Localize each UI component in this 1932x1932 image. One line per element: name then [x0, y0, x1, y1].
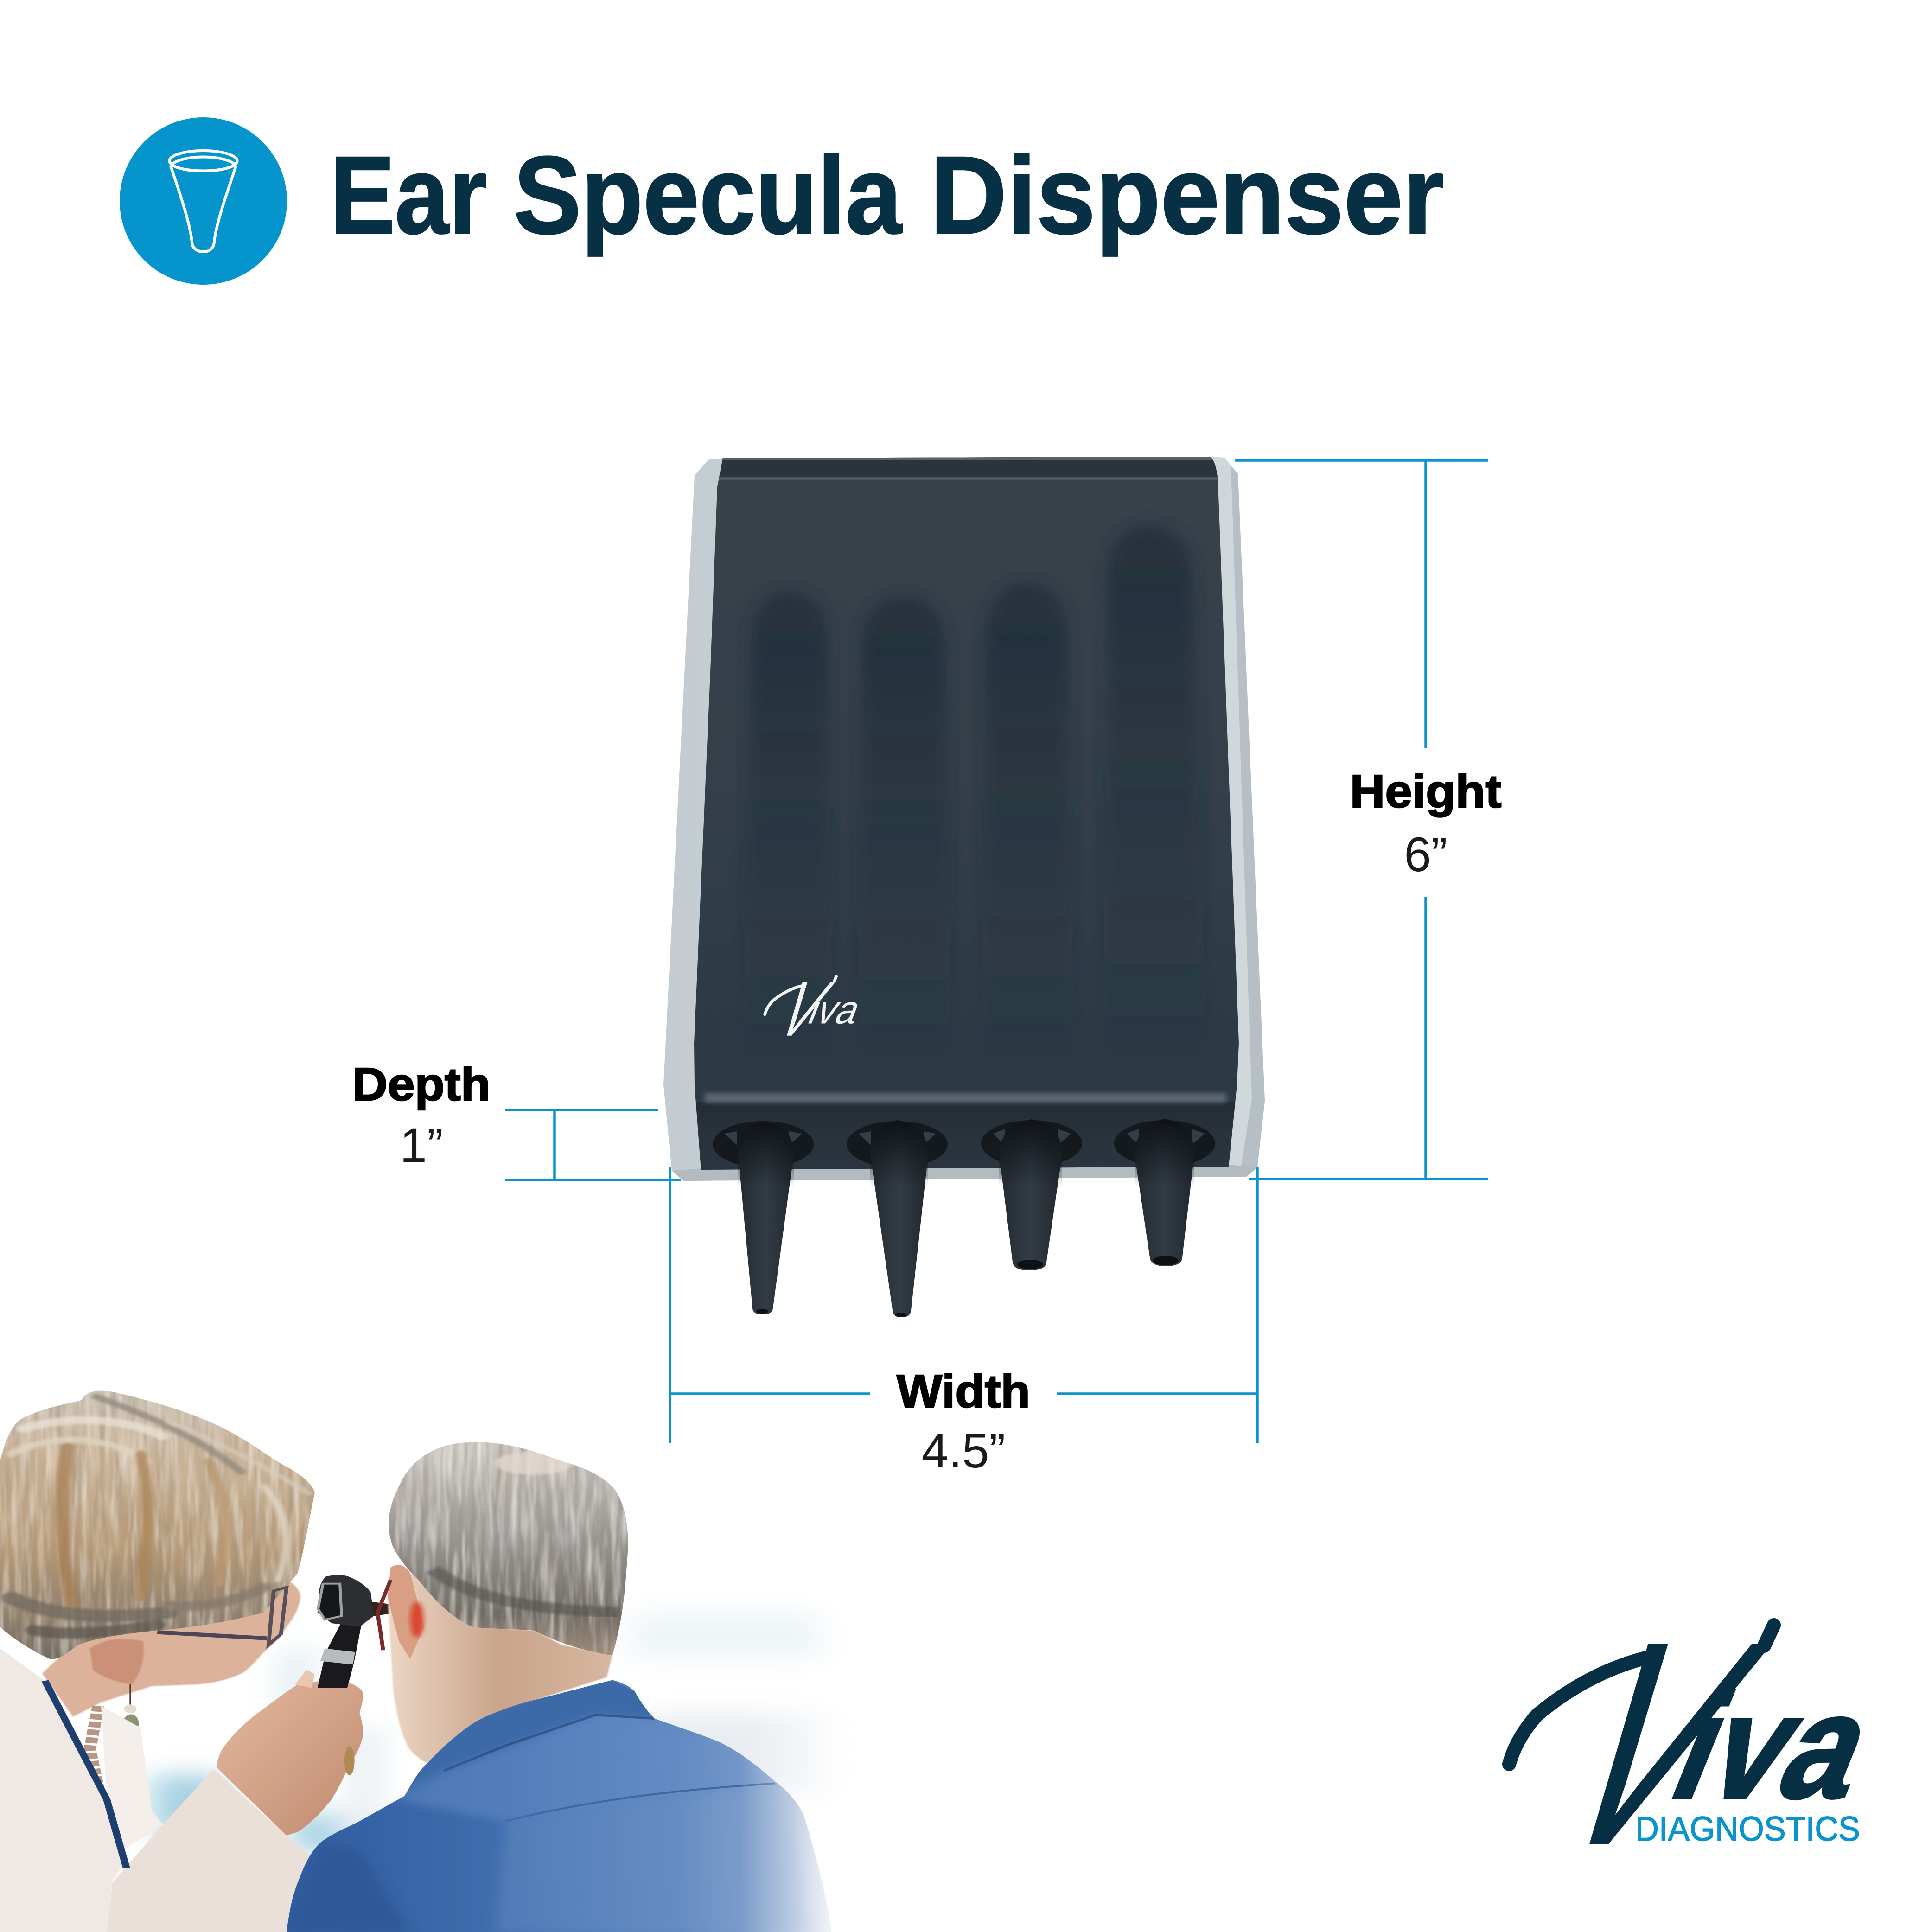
logo: Viva Diagnostics [1505, 1583, 1898, 1904]
clinician glasses [157, 1587, 287, 1645]
soft window background [152, 1613, 831, 1854]
clinician ear [90, 1639, 144, 1684]
height value: 6” [1404, 828, 1447, 882]
speculum 2 [870, 1120, 928, 1317]
shadow of stored specula 2 [858, 597, 951, 1080]
yoke seam [506, 1783, 775, 1821]
dark translucent panel [694, 457, 1239, 1170]
dimension: width [670, 1167, 1257, 1478]
patient hair [382, 1440, 635, 1659]
dispenser openings [713, 1120, 1215, 1167]
hair light texture [0, 1386, 320, 1663]
dimension: depth [352, 1058, 681, 1180]
depth value: 1” [400, 1118, 443, 1173]
front ledge highlight [705, 1093, 1226, 1103]
clinician earring [123, 1684, 139, 1732]
right edge fade [742, 1677, 871, 1932]
ledge highlight [714, 477, 1224, 480]
clinician hand [217, 1670, 363, 1836]
patient shirt [281, 1677, 837, 1932]
title: Specula [514, 134, 902, 257]
hair dark texture [0, 1386, 320, 1663]
patient glasses [377, 1580, 390, 1650]
Viva mark on the panel: V [764, 966, 845, 1052]
shadow of stored specula 3 [982, 583, 1075, 1080]
patient neck [388, 1569, 612, 1764]
clinician hair [0, 1386, 320, 1663]
speculum 4 [1135, 1119, 1194, 1266]
shirt collar [404, 1680, 655, 1796]
title: Dispenser [930, 134, 1444, 257]
housing bottom edge [672, 1165, 1257, 1181]
necklace [90, 1706, 98, 1789]
hair dark texture [382, 1440, 635, 1659]
top lip [714, 457, 1224, 477]
illustration: clinician examining a patient's ear [0, 1386, 871, 1932]
width value: 4.5” [922, 1424, 1005, 1478]
height label: Height [1350, 765, 1501, 817]
patient ear [388, 1565, 424, 1659]
clinician face and neck [42, 1580, 300, 1717]
translucent panel detail [686, 457, 1247, 1171]
yoke light [393, 1715, 775, 1821]
width label: Width [897, 1365, 1030, 1417]
bald crown [494, 1452, 573, 1475]
title: Ear [330, 134, 487, 257]
dimension: height [1235, 460, 1501, 1179]
sleeve shading [287, 1843, 410, 1932]
title [330, 134, 1444, 257]
lanyard [45, 1681, 127, 1868]
depth label: Depth [352, 1058, 491, 1110]
lab coat [0, 1648, 312, 1932]
otoscope [318, 1575, 399, 1688]
icon: ear speculum in blue circle [120, 117, 287, 285]
product: specula dispenser [663, 457, 1265, 1317]
shoulder light [494, 1785, 809, 1932]
logo subline: DIAGNOSTICS [1635, 1810, 1860, 1848]
shadow of stored specula 1 [743, 592, 833, 1080]
hair light texture [382, 1440, 635, 1659]
top edge highlight [714, 457, 1224, 460]
speculum 3 [999, 1119, 1062, 1270]
speculum 1 [738, 1121, 794, 1314]
nape shadow [433, 1569, 618, 1613]
dispenser grey housing [663, 457, 1265, 1181]
logo flourish [1509, 1625, 1774, 1764]
front face [686, 1102, 1247, 1171]
shadow of stored specula 4 [1103, 525, 1207, 1080]
logo wordmark: V [1505, 1583, 1806, 1904]
collar seam [444, 1715, 655, 1771]
Viva mark on the panel: iva [802, 988, 868, 1033]
housing shading [1231, 466, 1265, 1177]
logo wordmark: iva [1651, 1664, 1898, 1829]
hair strands [11, 1396, 309, 1633]
